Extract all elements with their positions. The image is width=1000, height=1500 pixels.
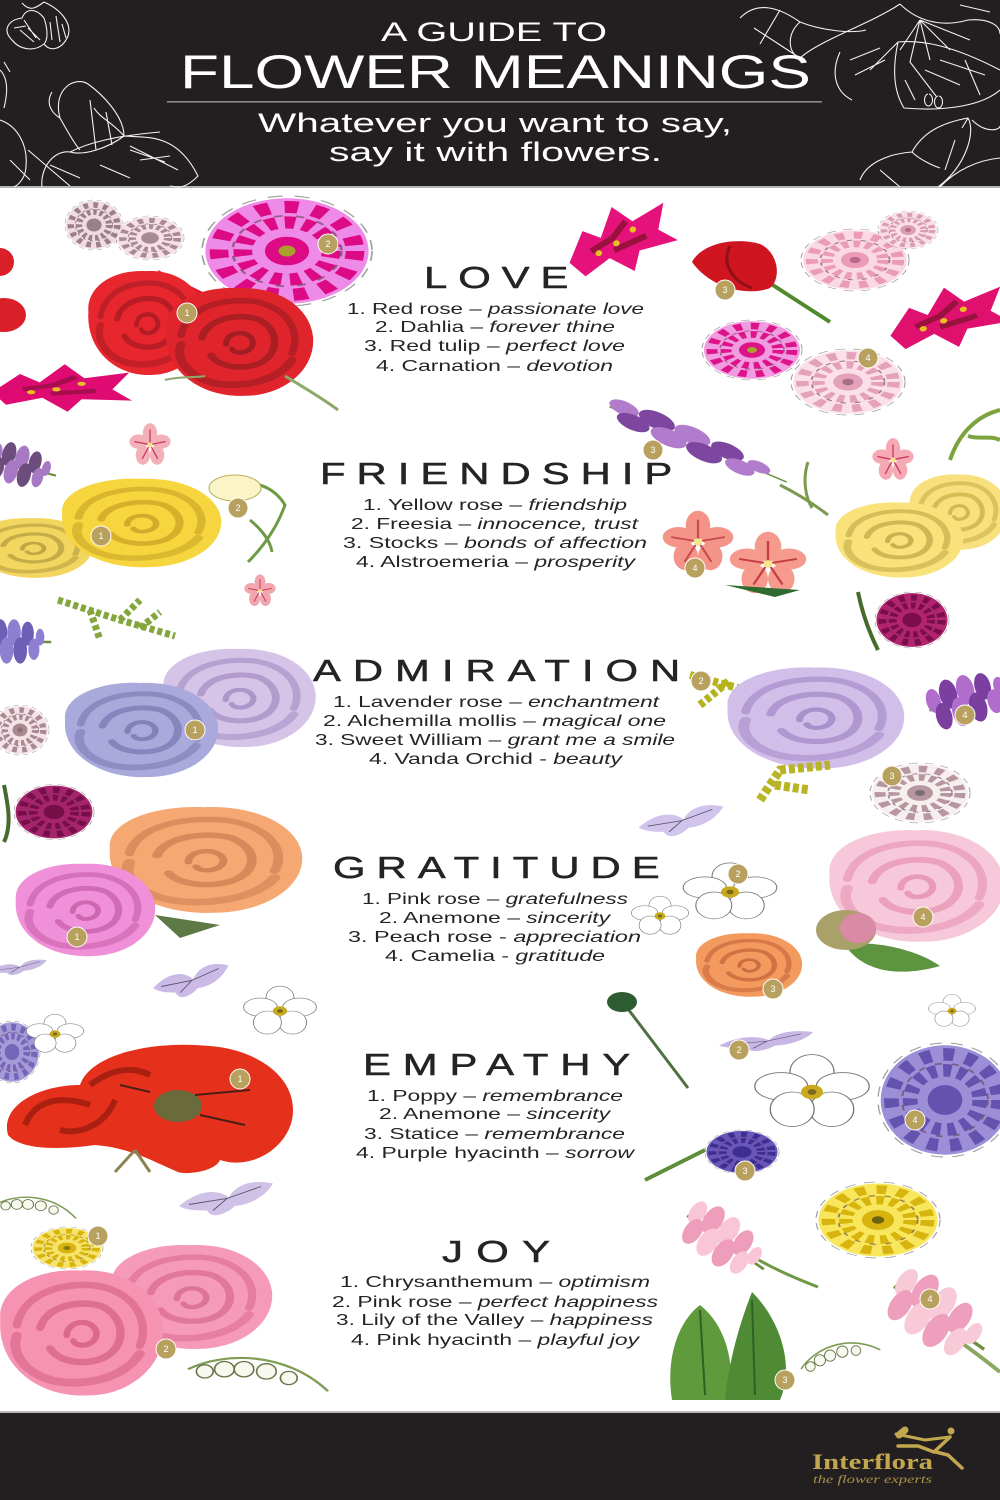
badges: admiration: 2	[698, 676, 704, 686]
text block: joy list	[332, 1274, 658, 1349]
badges: love: 3	[722, 285, 728, 295]
flower: hyacinth left edge	[0, 1021, 40, 1083]
heading: admiration: ADMIRATION	[313, 653, 680, 688]
header panel	[0, 0, 1000, 188]
flower: camellia	[829, 830, 1000, 942]
flower: small alstroemeria	[129, 423, 171, 465]
badges: love: 1	[184, 308, 190, 318]
flower: dahlia small	[702, 320, 802, 380]
badges: gratitude: 4	[920, 912, 926, 922]
flower: stocks left edge	[0, 619, 51, 664]
flower: lily of the valley bottom	[188, 1358, 328, 1391]
flower: peach rose right	[696, 933, 802, 997]
flower: pink hyacinth right	[876, 1259, 1000, 1374]
flower: orchid right	[883, 276, 1000, 360]
badges: love	[177, 234, 878, 368]
text block: admiration list: 2. Alchemilla mollis – magical one	[323, 713, 666, 730]
logo: tagline: the flower experts	[813, 1472, 932, 1486]
badges: friendship: 1	[98, 531, 104, 541]
header title: FLOWER MEANINGS	[180, 45, 811, 98]
line art: header flower bottom right	[860, 118, 1000, 187]
text block: admiration list: 1. Lavender rose – enchantment	[333, 694, 660, 711]
text block: admiration list: 4. Vanda Orchid - beauty	[369, 751, 623, 768]
flower: small alstroemeria	[244, 574, 276, 606]
header title: Whatever you want to say,	[258, 108, 732, 138]
logo: interflora wordmark: Interflora	[812, 1449, 933, 1474]
badges: admiration: 1	[192, 725, 198, 735]
panel: gratitude	[0, 784, 1000, 999]
badges: empathy: 4	[912, 1115, 918, 1125]
flower: dahlia	[202, 196, 372, 306]
flower: sweet william	[858, 592, 949, 650]
badges: admiration: 4	[962, 710, 968, 720]
text block: friendship list: 3. Stocks – bonds of affection	[343, 535, 647, 552]
flower: yellow roses right	[835, 474, 1000, 578]
badges: joy: 3	[782, 1375, 788, 1385]
text block: friendship list	[343, 497, 647, 571]
badges: empathy: 3	[742, 1166, 748, 1176]
text block: joy list: 4. Pink hyacinth – playful joy	[351, 1332, 640, 1349]
text block: friendship list: 2. Freesia – innocence, trust	[351, 516, 639, 533]
flower: freesia right	[950, 410, 1000, 460]
flower: anemone	[244, 986, 316, 1034]
flower: chrysanthemum left	[31, 1227, 103, 1269]
badges: gratitude: 1	[74, 932, 80, 942]
text block: love list: 4. Carnation – devotion	[376, 358, 613, 375]
header title	[167, 17, 822, 167]
flower: orchid left	[0, 364, 132, 412]
flower: red roses	[88, 270, 338, 410]
flower: vanda orchid centre left	[153, 964, 228, 997]
badges: love: 4	[865, 353, 871, 363]
badges: empathy: 1	[237, 1074, 243, 1084]
flower: anemone small	[631, 896, 689, 934]
heading: love: LOVE	[424, 260, 568, 295]
text block: admiration list: 3. Sweet William – grant me a smile	[315, 732, 675, 749]
text block: friendship list: 1. Yellow rose – friendship	[363, 497, 627, 514]
flower: alstroemeria	[663, 511, 806, 597]
flower: camellia bud and leaves	[816, 910, 940, 972]
panel: empathy	[0, 986, 1000, 1181]
flower: lily of the valley top left	[0, 1197, 76, 1218]
flower: anemone	[683, 863, 777, 919]
text block: gratitude list: 4. Camelia - gratitude	[385, 948, 605, 965]
flower: freesia left	[209, 475, 285, 562]
flower: lily of the valley right	[798, 1328, 880, 1384]
flower: vanda orchid top	[639, 805, 723, 836]
badges: joy: 4	[927, 1294, 933, 1304]
badges: gratitude	[67, 864, 933, 999]
text block: empathy list	[356, 1088, 636, 1162]
badges: joy: 1	[95, 1231, 101, 1241]
text block: love list: 2. Dahlia – forever thine	[375, 319, 615, 336]
flower: lavender roses left	[65, 649, 316, 777]
heading: friendship: FRIENDSHIP	[320, 456, 672, 491]
flower: statice stem	[607, 992, 688, 1088]
text block: joy list: 3. Lily of the Valley – happiness	[336, 1312, 653, 1329]
flower: pink carnations top right	[801, 211, 938, 291]
flower: vanda orchid small left	[0, 960, 47, 975]
panel: love	[0, 191, 1000, 415]
text block: admiration list	[315, 694, 675, 768]
flower: stocks right	[922, 663, 1000, 734]
text block: love list: 3. Red tulip – perfect love	[364, 338, 625, 355]
flower: stocks left edge	[0, 438, 61, 495]
logo: interflora runner	[896, 1428, 962, 1468]
flower: chrysanthemum right	[816, 1182, 940, 1258]
text block: empathy list: 1. Poppy – remembrance	[367, 1088, 623, 1105]
flower: purple hyacinth small	[645, 1130, 779, 1180]
text block: gratitude list: 3. Peach rose - appreciation	[348, 929, 641, 946]
badges: love: 2	[325, 239, 331, 249]
badges: friendship: 2	[235, 503, 241, 513]
heading: empathy: EMPATHY	[363, 1047, 630, 1082]
badges: friendship	[91, 440, 705, 578]
badges: joy: 2	[163, 1344, 169, 1354]
flower: yellow roses left	[0, 479, 221, 578]
flower: lily leaves	[670, 1292, 786, 1400]
text block: friendship list: 4. Alstroemeria – prosperity	[356, 554, 636, 571]
flower: alchemilla	[58, 600, 175, 640]
flower: anemone large	[755, 1055, 869, 1127]
flower: carnation	[791, 349, 905, 415]
header title: A GUIDE TO	[381, 17, 607, 47]
flower: sweet william left	[4, 784, 94, 842]
heading: joy: JOY	[442, 1234, 550, 1269]
footer panel	[0, 1411, 1000, 1500]
badges: gratitude: 3	[770, 984, 776, 994]
flower: carnation left edge	[0, 705, 49, 755]
flower: anemone small right	[929, 994, 975, 1026]
text block: joy list: 2. Pink rose – perfect happiness	[332, 1294, 658, 1311]
flower: lavender rose right	[727, 667, 904, 769]
flower: red rose edge	[0, 248, 26, 332]
flower: small alstroemeria	[872, 438, 914, 480]
line art: header flower bottom left	[0, 62, 198, 187]
flower: alchemilla right top	[690, 675, 745, 705]
line art: header flower top left	[7, 2, 69, 49]
flower: orchid top	[557, 191, 683, 289]
panel: joy	[0, 1182, 1000, 1400]
flower: red tulip	[692, 241, 830, 322]
flower: sweet william pale	[870, 763, 970, 823]
flower: pink carnations top left	[65, 200, 184, 260]
text block: empathy list: 2. Anemone – sincerity	[379, 1106, 611, 1123]
text block: gratitude list	[348, 891, 641, 965]
flower: anemone buds lavender	[719, 1031, 813, 1051]
flower: anemone left	[26, 1014, 84, 1052]
flower: peach rose and pink rose	[16, 807, 302, 956]
flower: alchemilla right bottom	[760, 765, 830, 800]
line art: header flower top right	[740, 4, 1000, 109]
flower: stocks	[603, 393, 828, 515]
flower: poppy	[7, 1045, 293, 1173]
badges: friendship: 4	[692, 563, 698, 573]
panel: friendship	[0, 393, 1000, 650]
header title: say it with flowers.	[329, 137, 662, 167]
badges: joy	[88, 1226, 940, 1390]
panel: admiration	[0, 619, 1000, 823]
flower: purple hyacinth	[878, 1043, 1000, 1157]
badges: empathy: 2	[736, 1045, 742, 1055]
badges: friendship: 3	[650, 445, 656, 455]
text block: joy list: 1. Chrysanthemum – optimism	[340, 1274, 650, 1291]
text block: gratitude list: 2. Anemone – sincerity	[379, 910, 611, 927]
badges: admiration: 3	[889, 771, 895, 781]
heading: gratitude: GRATITUDE	[333, 850, 660, 885]
badges: gratitude: 2	[735, 869, 741, 879]
badges: admiration	[185, 671, 975, 786]
text block: empathy list: 3. Statice – remembrance	[364, 1126, 625, 1143]
text block: love list	[347, 301, 644, 375]
text block: empathy list: 4. Purple hyacinth – sorrow	[356, 1145, 636, 1162]
badges: empathy	[230, 1040, 925, 1181]
flower: pink hyacinth stem	[672, 1193, 818, 1290]
flower: pink roses	[0, 1245, 272, 1396]
flower: vanda orchid	[179, 1182, 273, 1215]
text block: love list: 1. Red rose – passionate love	[347, 301, 644, 318]
text block: gratitude list: 1. Pink rose – gratefulness	[362, 891, 628, 908]
